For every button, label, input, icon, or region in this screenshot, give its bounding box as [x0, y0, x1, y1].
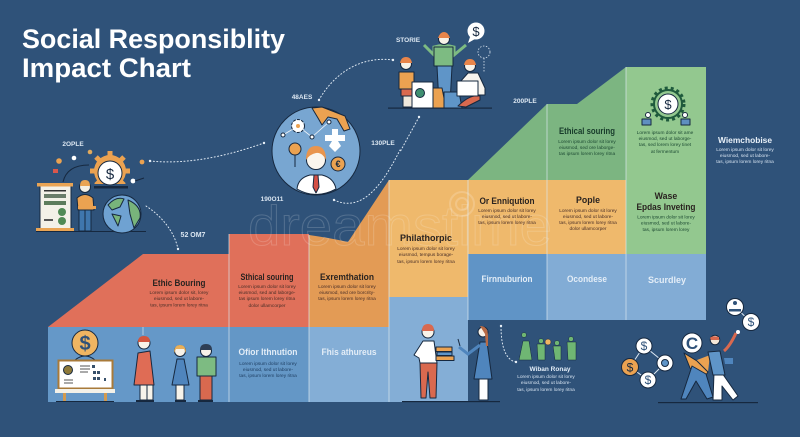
labels around the chart: 52 OM7 — [181, 232, 206, 239]
text: Fhis athureus: Fhis athureus — [322, 347, 377, 357]
labels around the chart: STORIE — [396, 37, 421, 44]
text: Philathorpic: tas, ipsum lorem lorey ritna — [397, 259, 455, 265]
icon: gear with two pots: $ — [664, 97, 672, 112]
text: Ofior Ithnution: Lorem ipsum dolor sit lorey — [239, 361, 297, 367]
icon: currency network: $ — [627, 360, 634, 374]
text: Wiemchobise: Lorem ipsum dolor sit lorey — [716, 147, 774, 153]
text: Philathorpic: eiusmod, tempus borage- — [399, 252, 454, 258]
text: Or Enniqution — [478, 196, 536, 226]
text: Ethic Bouring: eiusmod, sed ut labore- — [154, 296, 204, 302]
text: Ofior Ithnution — [238, 347, 298, 379]
labels around the chart: 190O11 — [261, 196, 284, 203]
text: Exremthation: tas, ipsum lorem lorey ritna — [318, 296, 376, 302]
icon: two people carrying coin: C — [686, 334, 698, 353]
text: Ofior Ithnution: Ofior Ithnution — [238, 347, 298, 357]
text: Sthical souring: dolor ullamcorper — [248, 303, 286, 309]
icon: currency network: $ — [641, 339, 648, 353]
text: green gear description: tas, sed lorem lorey tinet — [639, 142, 692, 148]
panel: red steps — [48, 234, 309, 327]
icon: shopping bag — [412, 82, 462, 108]
labels around the chart: 200PLE — [513, 98, 537, 105]
text: Wiban Ronay: tas, ipsum lorem lorey ritna — [517, 387, 575, 393]
text: Sthical souring — [238, 272, 296, 309]
text: Firnnuburion: Firnnuburion — [482, 274, 532, 284]
text: Pople: tas, ipsum lorem lorey ritna — [559, 220, 617, 226]
icon: presentation board — [55, 360, 115, 401]
watermark: dreamstime — [248, 194, 552, 257]
text: Ethic Bouring: Ethic Bouring — [152, 278, 206, 288]
text: Ofior Ithnution: tas, ipsum lorem lorey ritna — [239, 373, 297, 379]
text: Wase Epdas Inveting: Wase — [655, 191, 677, 201]
icon: dashed idea — [478, 46, 490, 73]
icon: central circle with man and ideas: € — [335, 159, 341, 169]
labels around the chart: 130PLE — [371, 140, 395, 147]
text: Wiban Ronay: eiusmod, sed ut labore- — [521, 380, 571, 386]
icon: woman in blue dress — [172, 345, 189, 402]
text: Wiban Ronay — [517, 366, 575, 393]
labels around the chart — [62, 37, 537, 239]
text: Ethical souring: eiusmod, sed ore laborge- — [559, 145, 615, 151]
icon: child — [399, 57, 414, 107]
text: Sthical souring: Sthical souring — [240, 272, 294, 282]
icon: seated man with laptop — [457, 59, 485, 107]
text: Or Enniqution: Or Enniqution — [480, 196, 534, 206]
icon: two people carrying coin — [658, 298, 760, 403]
text: green gear description: Lorem ipsum dolor sit ame — [637, 130, 694, 136]
icon: currency network: $ — [645, 373, 652, 387]
text: Pople: Pople — [576, 195, 600, 205]
text: Wiban Ronay: Wiban Ronay — [529, 366, 571, 373]
text: Ethic Bouring: tas, ipsum lorem lorey ritna — [150, 302, 208, 308]
icon: presenter with box — [402, 324, 500, 402]
icon: woman pointing — [458, 326, 492, 400]
panel: green step right — [626, 67, 706, 254]
text: Philathorpic: Lorem ipsum dolor sit lorey — [397, 246, 455, 252]
watermark swirl — [450, 192, 474, 216]
text: Sthical souring: eiusmod, sed and laborge- — [239, 290, 296, 296]
text: Ethical souring: Lorem ipsum dolor sit lorey — [558, 139, 616, 145]
text: Pople: Lorem ipsum dolor sit lorey — [559, 208, 617, 214]
text: Pople: eiusmod, sed ut labore- — [563, 214, 613, 220]
text: Wiemchobise: eiusmod, sed ut labore- — [720, 153, 770, 159]
text: Philathorpic: Philathorpic — [400, 233, 452, 243]
text: Or Enniqution: Lorem ipsum dolor sit lorey — [478, 208, 536, 214]
text: Scurdley: Scurdley — [648, 275, 686, 285]
text: Pople: dolor ullamcorper — [569, 226, 607, 232]
icon: two people carrying coin: $ — [748, 315, 755, 329]
staircase chart — [48, 67, 706, 402]
text: Sthical souring: tas ipsum lorem lorey ritna — [239, 296, 295, 302]
icon group: coin and presentation board — [55, 330, 115, 402]
text: Wase Epdas Inveting: Epdas Inveting — [636, 202, 696, 212]
icon: dollar coin: $ — [79, 333, 91, 355]
icon: central circle with man and ideas — [272, 107, 360, 195]
panel: orange step — [309, 180, 389, 327]
text: Philathorpic — [397, 233, 455, 265]
icon group: board, man, gear and globe — [36, 150, 146, 233]
text: Ethic Bouring — [150, 278, 209, 308]
icon: floating dots — [53, 150, 144, 183]
text: Wiban Ronay: Lorem ipsum dolor sit lorey — [517, 374, 575, 380]
panel: blue base row — [48, 254, 706, 402]
icon: man — [77, 180, 96, 231]
panel: yellow steps — [389, 180, 626, 297]
text: Or Enniqution: eiusmod, sed ut labore- — [482, 214, 532, 220]
text: Wiemchobise: Wiemchobise — [718, 136, 773, 145]
text: Exremthation: Exremthation — [320, 272, 374, 282]
text: Pople — [559, 195, 617, 232]
icon group: three people with bag and laptop — [388, 22, 492, 109]
icon: standing man — [424, 32, 466, 104]
icon: man in green shirt — [197, 344, 216, 402]
icon: gear with dollar: $ — [106, 166, 115, 183]
labels around the chart: 2OPLE — [62, 141, 84, 148]
text: Or Enniqution: tas, ipsum lorem lorey ritna — [478, 220, 536, 226]
title — [22, 24, 285, 83]
text: Ethical souring — [558, 126, 616, 157]
title: Impact Chart — [22, 53, 191, 83]
text: green gear description: at fermentum — [651, 149, 679, 155]
text: Exremthation: eiusmod, sed ore borcrity- — [319, 290, 375, 296]
text: Sthical souring: Lorem ipsum dolor sit lorey — [238, 284, 296, 290]
icon: info board — [36, 183, 74, 231]
text: Ofior Ithnution: eiusmod, sed ut labore- — [243, 367, 293, 373]
panel: green step middle — [468, 67, 626, 180]
text: Ocondese: Ocondese — [567, 274, 607, 284]
text: Wase Epdas Inveting: Lorem ipsum dolor sit lorey — [637, 214, 695, 220]
labels around the chart: 48AES — [292, 94, 313, 101]
dotted connectors — [146, 59, 517, 363]
icon: gear with two pots — [642, 88, 690, 125]
text: Wase Epdas Inveting: tas, ipsum lorem lorey — [643, 227, 690, 233]
text: Ethic Bouring: Lorem ipsum dolor sit, lorey — [150, 290, 209, 296]
text: Wase Epdas Inveting: eiusmod, sed ut labore- — [641, 220, 691, 226]
text: Exremthation: Lorem ipsum dolor sit lorey — [318, 284, 376, 290]
icon: currency network — [622, 338, 673, 388]
text: Ethical souring: tas ipsum lorem lorey ritna — [559, 151, 615, 157]
text: Wiemchobise — [716, 136, 774, 165]
title: Social Responsiblity — [22, 24, 285, 54]
text: Wiemchobise: tas, ipsum lorem lorey ritna — [716, 159, 774, 165]
icon: figure in red dress — [134, 336, 154, 402]
text: green gear description — [637, 130, 694, 155]
text: Wase Epdas Inveting — [636, 191, 696, 233]
icon: speech bubble dollar: $ — [472, 24, 480, 39]
icon: green group of people — [519, 332, 576, 360]
text: Ethical souring: Ethical souring — [559, 126, 615, 136]
icon: globe — [103, 195, 141, 233]
text: Exremthation — [318, 272, 376, 302]
text: green gear description: eiusmod, sed ut laborge- — [639, 136, 692, 142]
